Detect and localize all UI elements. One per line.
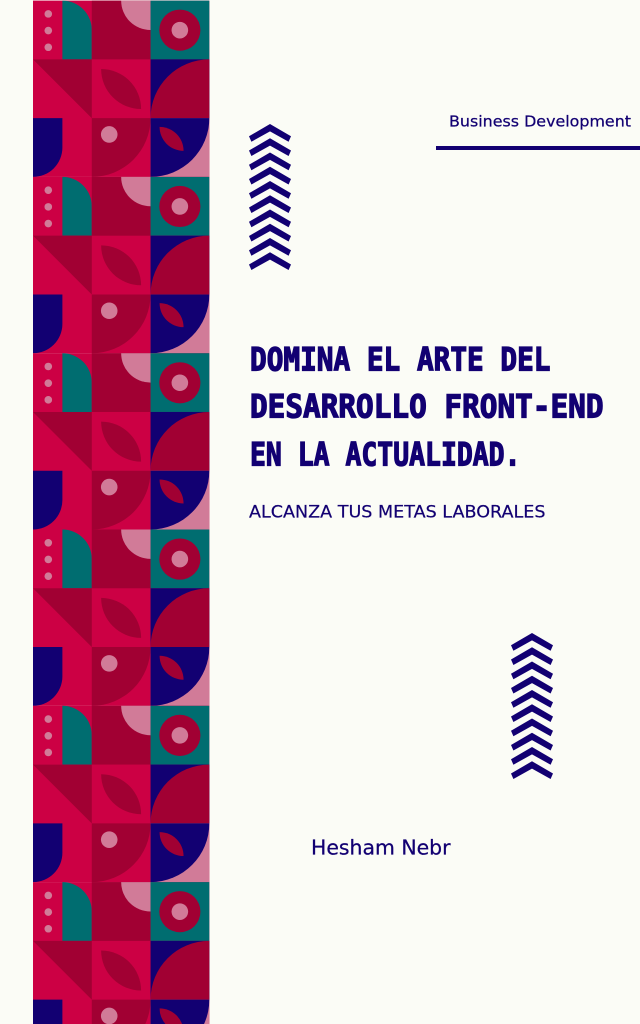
title: EN LA ACTUALIDAD. (250, 435, 520, 473)
header rule (436, 146, 640, 150)
panel: geometric pattern column (33, 1, 209, 1024)
pattern tile 2 (33, 177, 209, 353)
author name: Hesham Nebr (311, 836, 451, 860)
title (250, 340, 604, 473)
pattern tile 5 (33, 706, 209, 882)
pattern tile 4 (33, 530, 209, 706)
category label: Business Development (449, 112, 631, 130)
pattern tile 6 (33, 882, 209, 1024)
pattern tile 3 (33, 353, 209, 530)
title: DESARROLLO FRONT-END (250, 388, 604, 426)
icon: top chevron stack (249, 124, 291, 270)
icon: bottom chevron stack (511, 633, 553, 779)
pattern tile 1 (33, 1, 209, 177)
subtitle: ALCANZA TUS METAS LABORALES (249, 502, 546, 522)
title: DOMINA EL ARTE DEL (250, 340, 550, 378)
